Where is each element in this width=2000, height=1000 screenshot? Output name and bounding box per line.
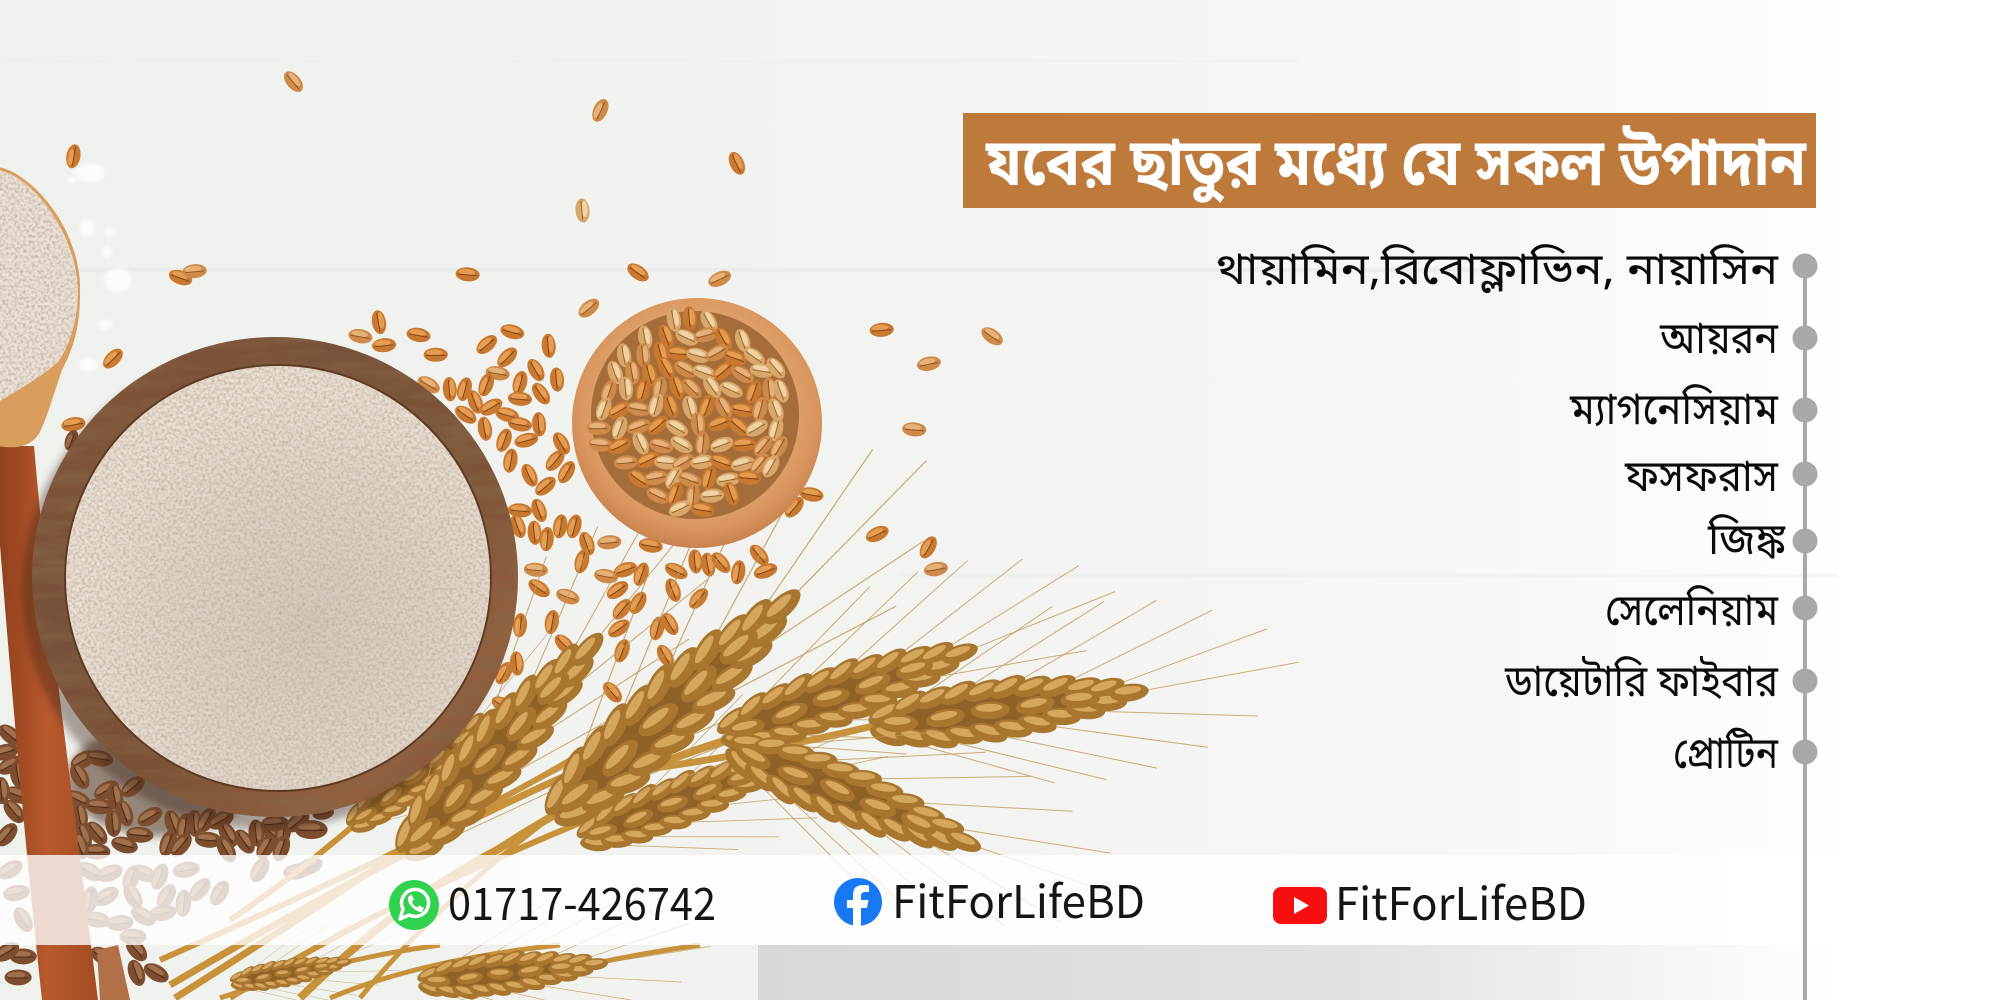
contact: Facebook: FitForLifeBD <box>892 866 1145 931</box>
item: zinc: জিঙ্ক <box>1707 513 1786 572</box>
small wooden bowl with wheat grains <box>572 298 822 548</box>
flour dust specks near the spoon <box>68 164 132 372</box>
item: selenium: সেলেনিয়াম <box>1605 584 1779 643</box>
item: thiamine, riboflavin, niacin: থায়ামিন,রিবোফ্লাভিন, নায়াসিন <box>1216 243 1779 302</box>
item: iron: আয়রন <box>1659 313 1778 371</box>
vertical timeline line <box>1803 265 1807 1000</box>
big wooden bowl with flour <box>22 337 518 830</box>
title banner: যবের ছাতুর মধ্যে যে সকল উপাদান <box>985 124 1807 212</box>
item: dietary fiber: ডায়েটারি ফাইবার <box>1504 655 1779 714</box>
icon: Facebook <box>834 878 882 926</box>
item: phosphorus: ফসফরাস <box>1624 451 1779 509</box>
scattered wheat grains <box>60 68 1006 717</box>
wheat stems <box>160 722 890 998</box>
dark wheat grains under the bowl <box>0 720 335 988</box>
contact: YouTube: FitForLifeBD <box>1335 868 1587 933</box>
spoon with flour <box>0 167 80 447</box>
icon: YouTube <box>1273 887 1327 924</box>
contact: WhatsApp: 01717-426742 <box>448 868 716 933</box>
footer contact bar <box>0 855 1838 945</box>
item: protein: প্রোটিন <box>1673 727 1778 786</box>
nutrient list <box>1216 243 1818 786</box>
icon: WhatsApp <box>389 880 439 930</box>
spoon handle <box>0 446 130 1000</box>
wheat ears <box>222 384 1313 1000</box>
item: magnesium: ম্যাগনেসিয়াম <box>1569 383 1779 442</box>
